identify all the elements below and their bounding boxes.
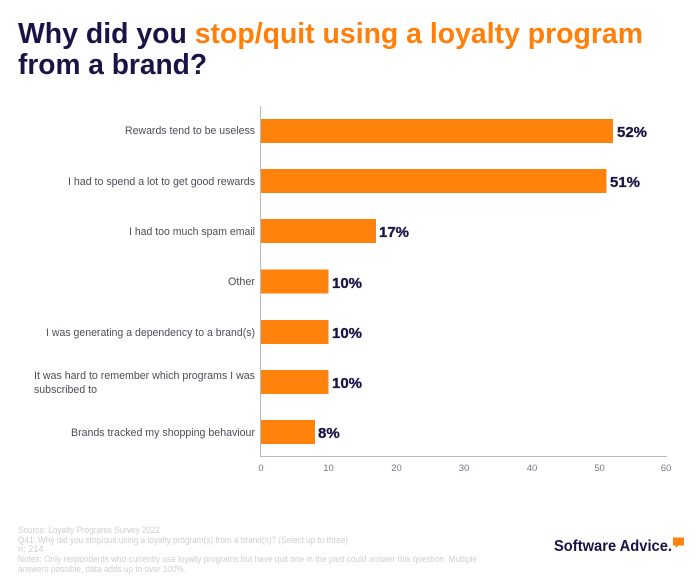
category labels: Rewards tend to be useless <box>125 125 255 137</box>
x axis tick labels <box>258 463 671 474</box>
category labels: I had to spend a lot to get good rewards <box>68 176 255 188</box>
source notes <box>18 525 477 574</box>
title: from a brand? <box>18 49 207 81</box>
bars <box>261 119 613 444</box>
value labels: 8% <box>318 425 340 442</box>
x axis tick labels: 40 <box>527 463 537 474</box>
icon: speech bubble <box>673 538 684 548</box>
value labels: 10% <box>332 275 362 292</box>
value labels: 17% <box>379 224 409 241</box>
value labels: 10% <box>332 375 362 392</box>
source notes: answers possible, data adds up to over 100%. <box>18 564 186 574</box>
value labels: 52% <box>617 124 647 141</box>
title: Why did you stop/quit using a loyalty program <box>18 18 643 50</box>
category labels: subscribed to <box>34 384 97 396</box>
axes <box>260 106 667 456</box>
title <box>18 18 643 81</box>
bar chart <box>34 106 671 474</box>
category labels: I had too much spam email <box>129 226 255 238</box>
category labels: Other <box>228 276 255 288</box>
value labels: 51% <box>610 174 640 191</box>
logo wordmark: Software Advice. <box>554 538 672 555</box>
source notes: n: 214 <box>18 544 44 554</box>
value labels: 10% <box>332 325 362 342</box>
x axis tick labels: 60 <box>661 463 671 474</box>
x axis tick labels: 20 <box>391 463 402 474</box>
source notes: Notes: Only respondents who currently use loyalty programs but have quit one in the past could answer this question. Multiple <box>18 554 477 564</box>
category labels: I was generating a dependency to a brand(s) <box>46 327 255 339</box>
x axis tick labels: 0 <box>258 463 264 474</box>
x axis tick labels: 50 <box>594 463 605 474</box>
category labels: Brands tracked my shopping behaviour <box>71 427 255 439</box>
category labels <box>34 125 255 439</box>
logo: Software Advice <box>554 538 684 555</box>
value labels <box>318 124 647 442</box>
x axis tick labels: 10 <box>323 463 334 474</box>
x axis tick labels: 30 <box>459 463 469 474</box>
source notes: Source: Loyalty Programs Survey 2022 <box>18 525 160 535</box>
source notes: Q41: Why did you stop/quit using a loyalty program(s) from a brand(s)? (Select up to three) <box>18 535 348 545</box>
category labels: It was hard to remember which programs I was <box>34 370 255 382</box>
